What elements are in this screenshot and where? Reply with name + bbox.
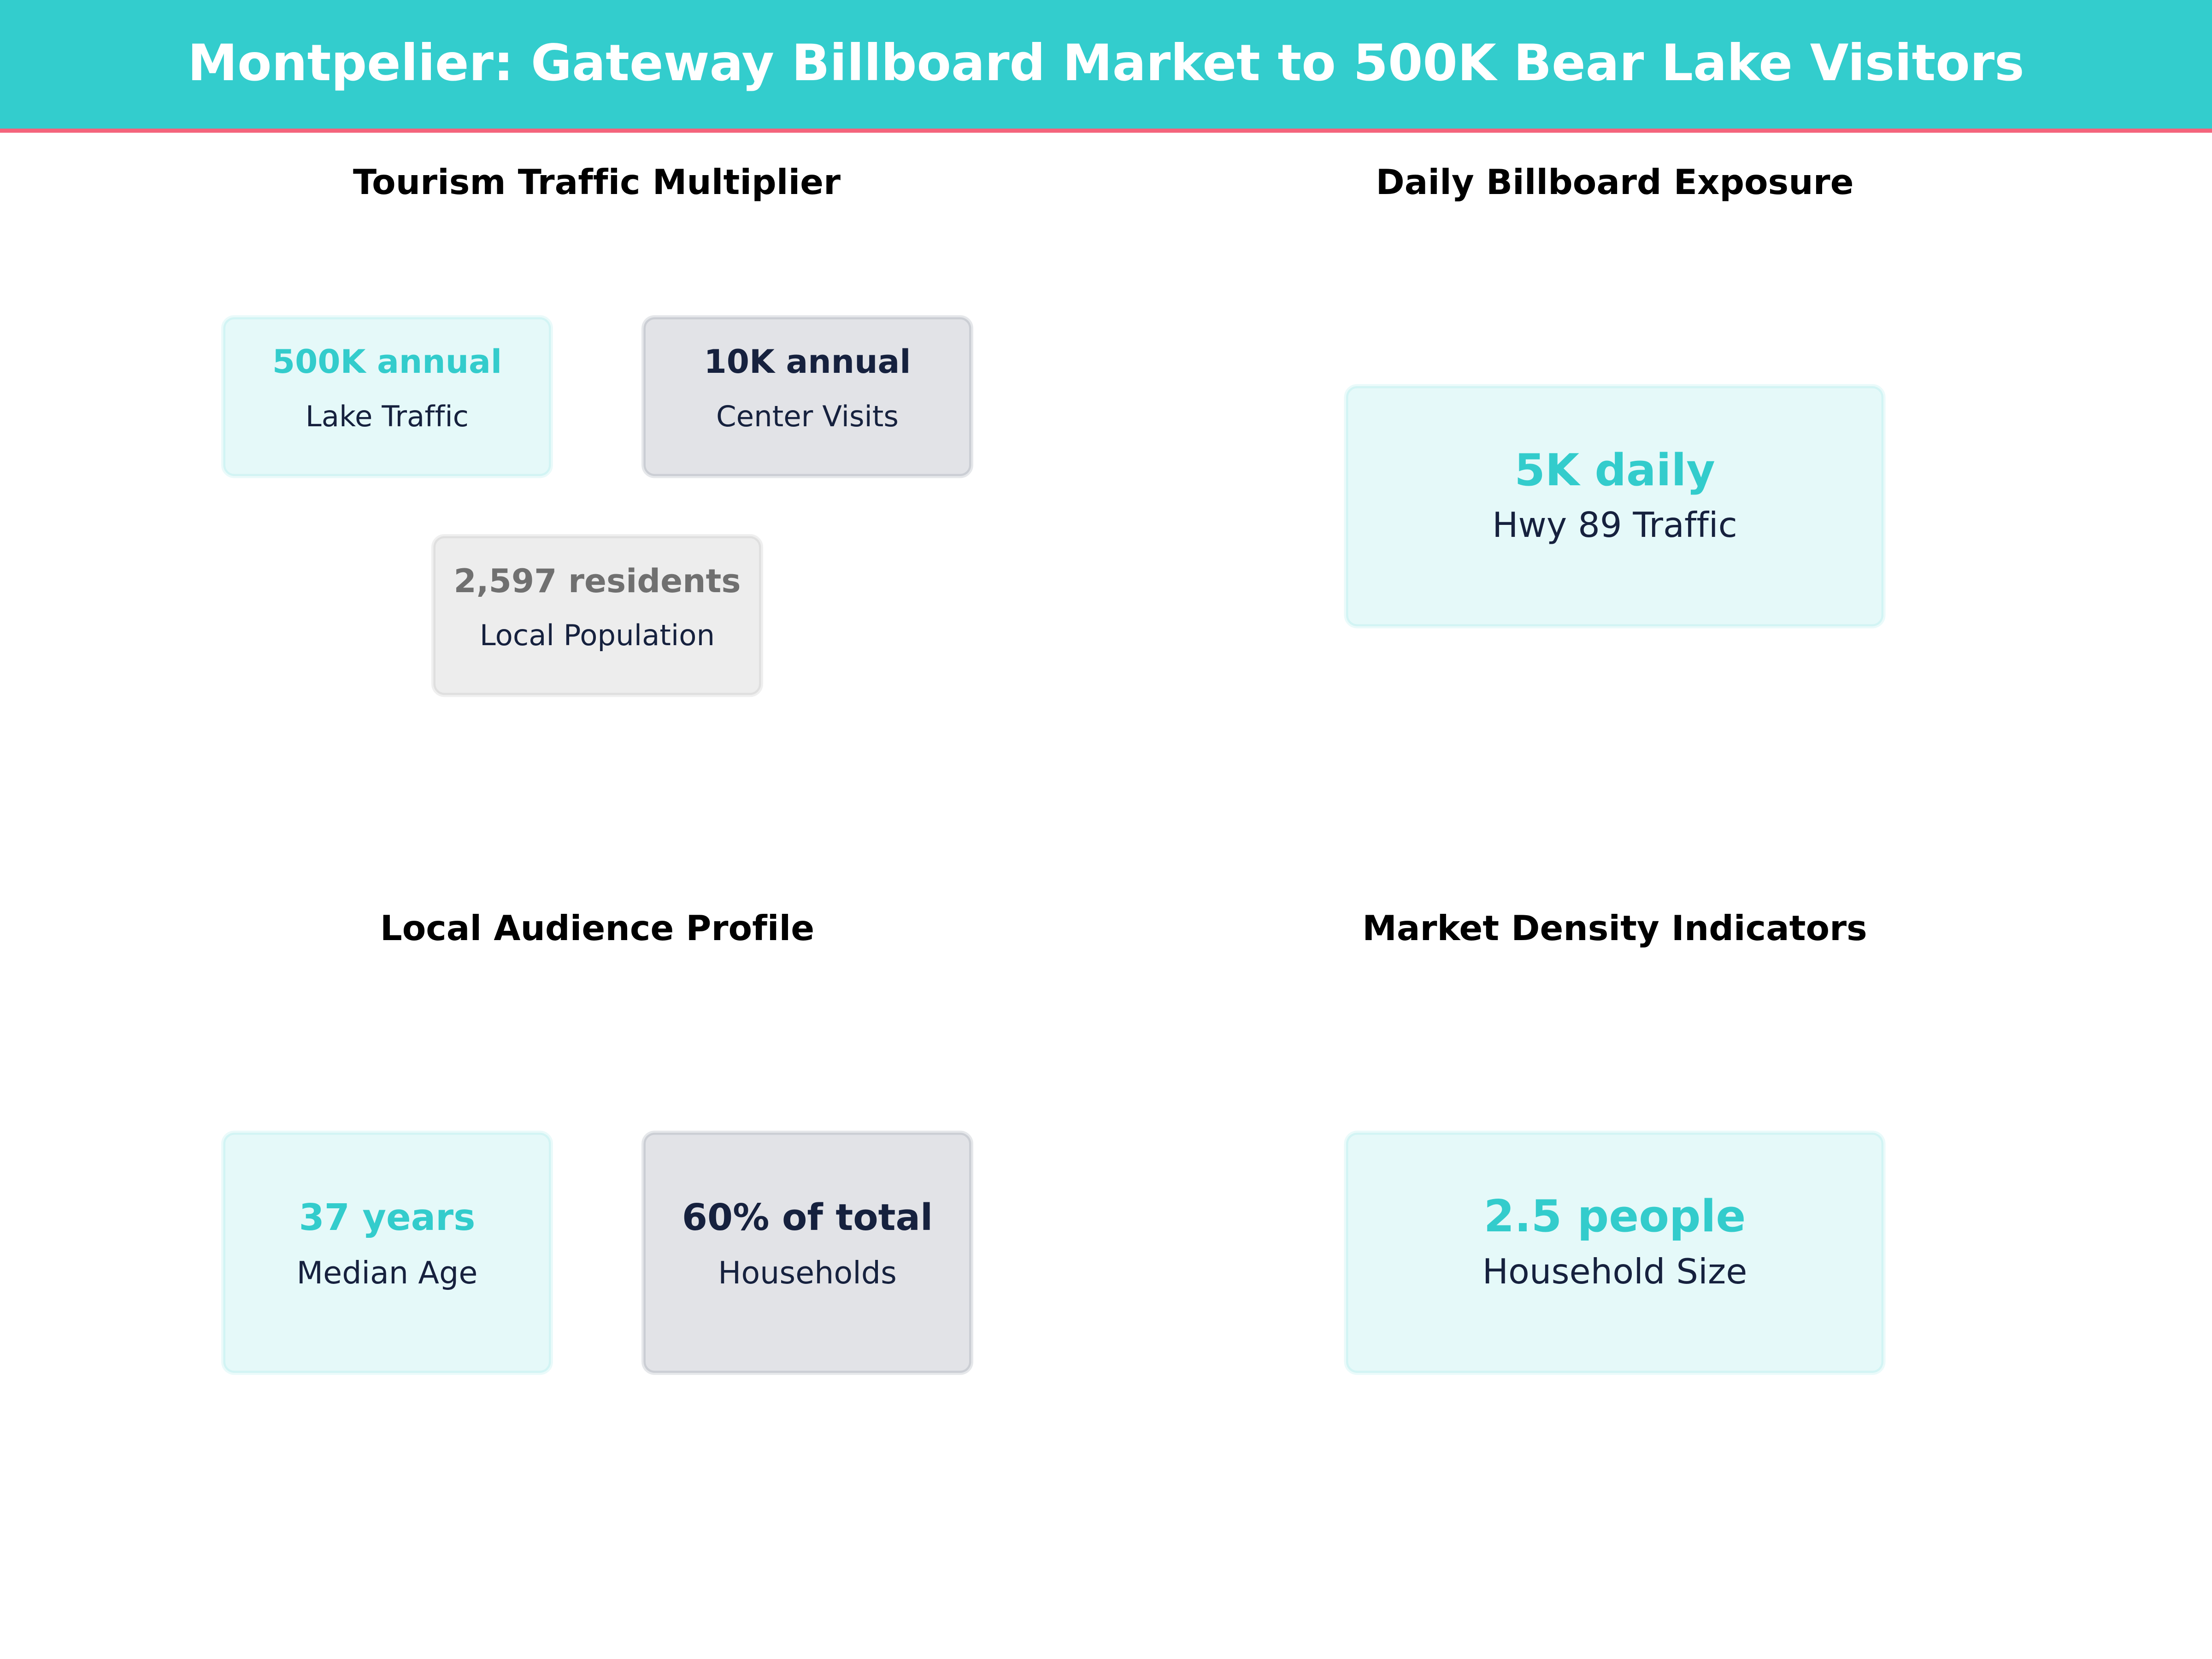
card: household size: 2.5 people <box>1484 1190 1746 1242</box>
card: household size: Household Size <box>1483 1251 1747 1292</box>
heading: daily billboard exposure: Daily Billboard Exposure <box>1376 162 1853 202</box>
title banner: Montpelier: Gateway Billboard Market to 500K Bear Lake Visitors <box>188 34 2024 92</box>
card: local population: Local Population <box>480 618 715 652</box>
card: lake traffic <box>223 317 551 476</box>
card: median age <box>223 1133 551 1373</box>
panel: market density indicators <box>1346 908 1883 1373</box>
card: highway 89 traffic <box>1346 386 1883 626</box>
heading: market density indicators: Market Density Indicators <box>1362 908 1867 948</box>
heading: tourism traffic multiplier: Tourism Traffic Multiplier <box>353 162 841 202</box>
card: lake traffic: 500K annual <box>272 342 502 381</box>
card: center visits: Center Visits <box>716 400 899 433</box>
card: highway 89 traffic: 5K daily <box>1514 444 1715 496</box>
card: median age: 37 years <box>299 1196 475 1239</box>
card: local population: 2,597 residents <box>453 562 741 600</box>
card: median age: Median Age <box>297 1255 477 1291</box>
card: households: Households <box>718 1255 897 1291</box>
panel: daily billboard exposure <box>1346 162 1883 626</box>
title banner <box>0 0 2212 133</box>
card: highway 89 traffic: Hwy 89 Traffic <box>1492 505 1737 545</box>
card: center visits: 10K annual <box>704 342 911 381</box>
panel: tourism traffic multiplier <box>223 162 971 695</box>
card: households: 60% of total <box>682 1196 933 1239</box>
card: local population <box>433 536 761 695</box>
heading: local audience profile: Local Audience Profile <box>380 908 814 948</box>
panel: local audience profile <box>223 908 971 1373</box>
card: center visits <box>643 317 971 476</box>
card: households <box>643 1133 971 1373</box>
card: household size <box>1346 1133 1883 1373</box>
card: lake traffic: Lake Traffic <box>306 400 469 433</box>
